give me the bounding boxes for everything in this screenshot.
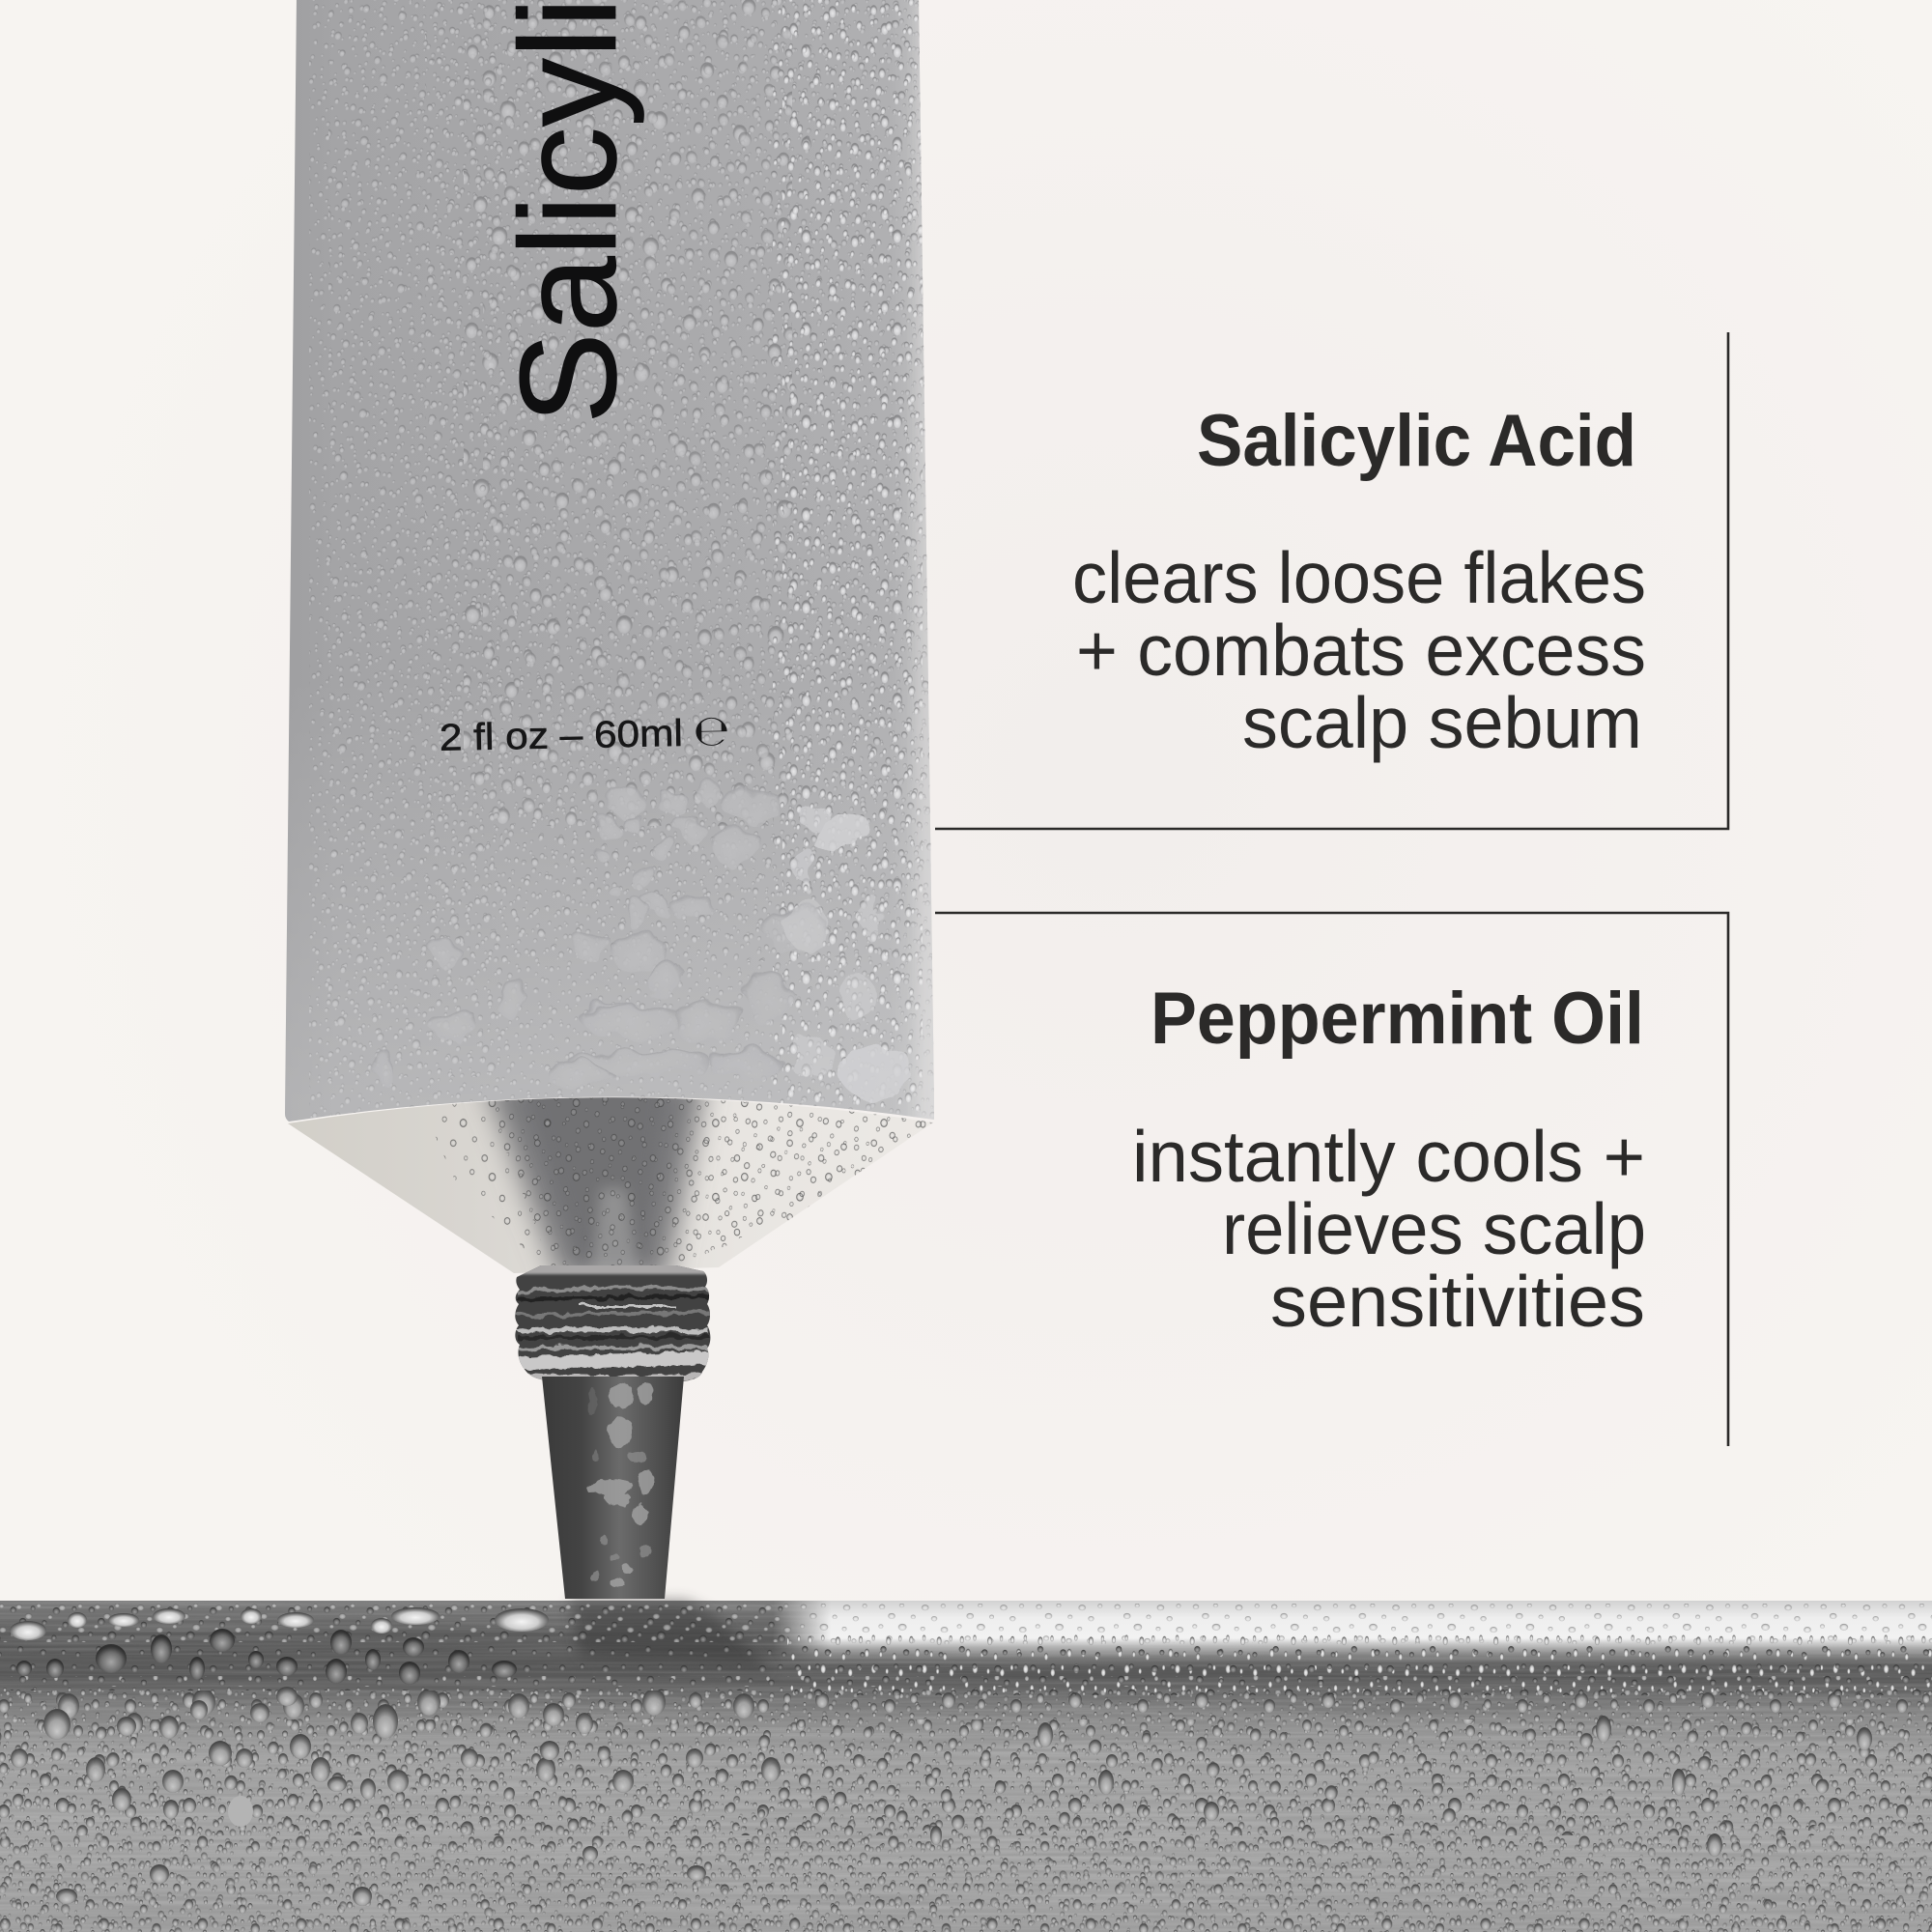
text block: salicylic acid benefit — [1072, 537, 1646, 763]
text block: salicylic acid benefit: + combats excess — [1076, 610, 1646, 691]
tube label: volume — [439, 706, 730, 761]
tube label: volume: 2 fl oz – 60ml — [439, 713, 683, 759]
text block: peppermint oil benefit: relieves scalp — [1222, 1188, 1646, 1269]
text block: salicylic acid benefit: scalp sebum — [1242, 682, 1642, 763]
heading: peppermint oil: Peppermint Oil — [1151, 978, 1644, 1060]
text block: peppermint oil benefit: instantly cools + — [1132, 1116, 1645, 1197]
nozzle tip — [542, 1377, 684, 1599]
threaded neck — [515, 1265, 711, 1381]
ground droplets: large left-side drops — [10, 1607, 549, 1685]
bracket line: peppermint oil — [935, 913, 1728, 1446]
large flattened droplets — [373, 779, 826, 1089]
text block: salicylic acid benefit: clears loose flakes — [1072, 537, 1646, 618]
text block: peppermint oil benefit: sensitivities — [1270, 1261, 1645, 1342]
tube label: volume: ℮ — [693, 706, 730, 756]
ground: wet metal surface — [0, 1601, 1932, 1932]
tube — [270, 0, 947, 1604]
callout: peppermint oil — [935, 913, 1728, 1446]
text block: peppermint oil benefit — [1132, 1116, 1646, 1342]
heading: salicylic acid: Salicylic Acid — [1197, 400, 1636, 482]
funnel shoulder of the tube — [288, 1097, 933, 1273]
tube body with condensation — [270, 0, 947, 1140]
callout: salicylic acid — [935, 332, 1728, 829]
bracket line: salicylic acid — [935, 332, 1728, 829]
